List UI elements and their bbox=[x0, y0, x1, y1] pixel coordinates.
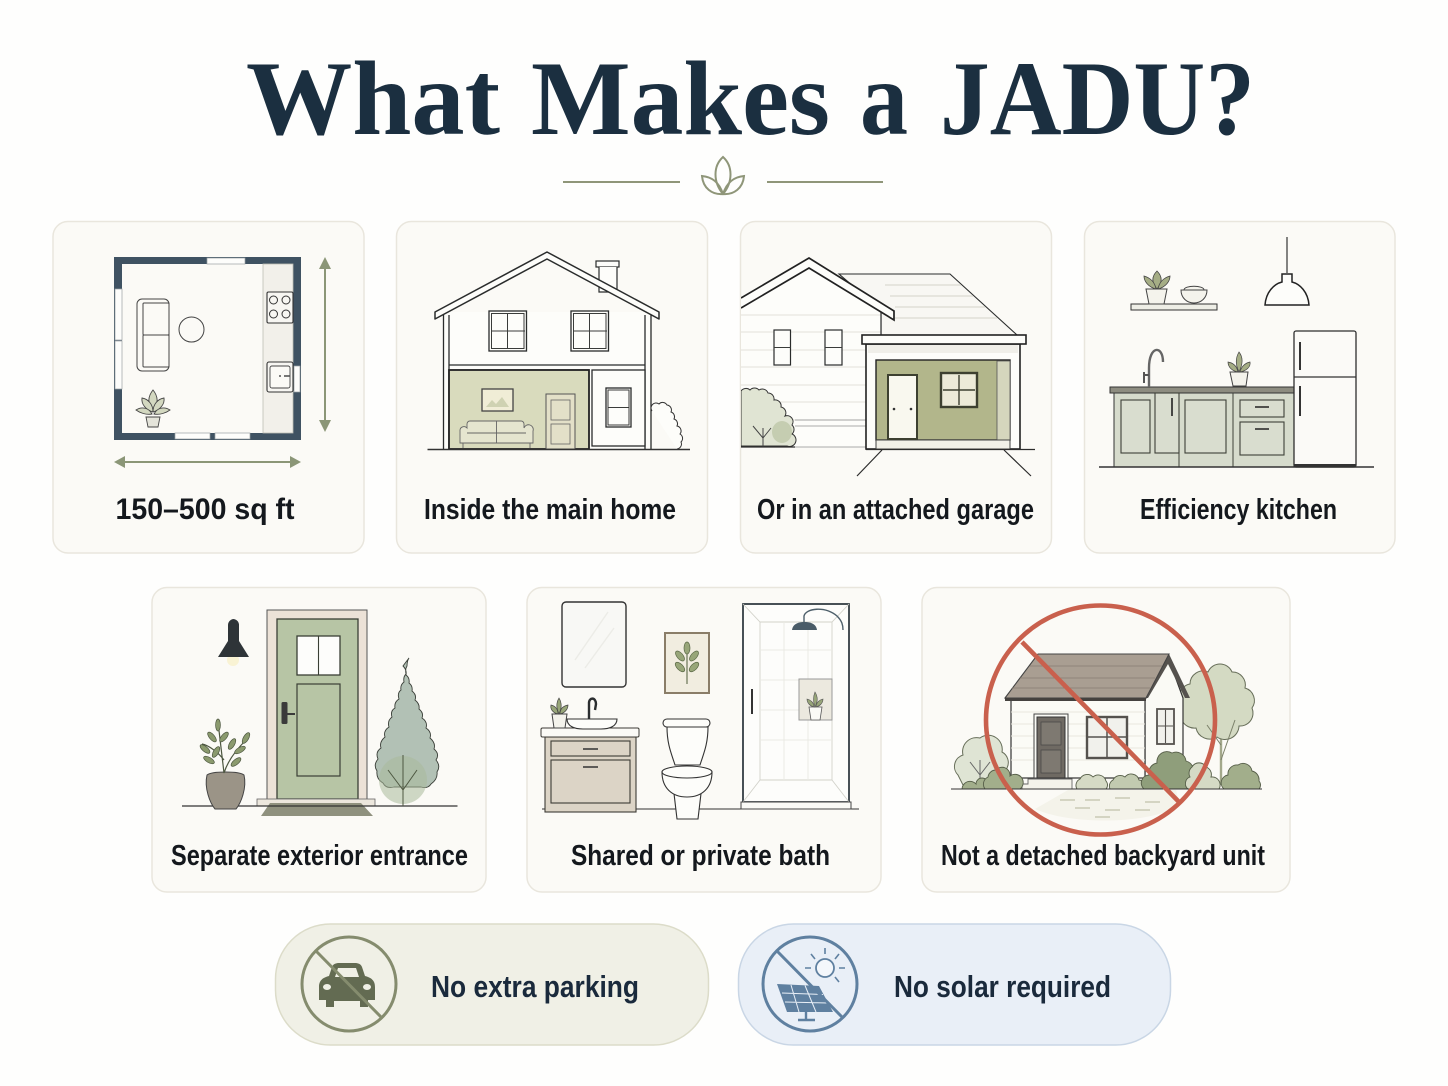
panel: attached garage bbox=[740, 222, 1052, 553]
title: What bbox=[246, 40, 500, 157]
title: Makes bbox=[531, 40, 830, 157]
panel: 150-500 sq ft bbox=[53, 222, 364, 553]
panel: efficiency kitchen bbox=[1084, 222, 1395, 553]
floor plan bbox=[114, 257, 301, 440]
label: Or in an attached garage bbox=[757, 494, 1034, 526]
bathroom illustration bbox=[541, 602, 859, 819]
title: a bbox=[860, 40, 908, 157]
entrance illustration bbox=[182, 610, 458, 816]
title: JADU? bbox=[940, 40, 1255, 157]
prohibition sign bbox=[986, 606, 1215, 834]
pill: no solar required bbox=[738, 924, 1170, 1045]
house illustration bbox=[428, 252, 690, 450]
pill: no extra parking bbox=[276, 924, 708, 1045]
label: No solar required bbox=[894, 969, 1111, 1004]
icon: no solar bbox=[763, 937, 857, 1031]
dimension arrows bbox=[114, 257, 331, 468]
backyard cottage illustration bbox=[951, 654, 1262, 821]
panel: not a detached backyard unit bbox=[922, 588, 1290, 892]
label: Not a detached backyard unit bbox=[941, 840, 1265, 872]
garage house illustration bbox=[741, 258, 1035, 476]
title divider with leaf icon bbox=[563, 157, 883, 194]
panel: separate exterior entrance bbox=[152, 588, 486, 892]
label: No extra parking bbox=[431, 969, 639, 1004]
label: 150–500 sq ft bbox=[116, 493, 295, 526]
label: Shared or private bath bbox=[571, 840, 830, 872]
label: Efficiency kitchen bbox=[1140, 494, 1337, 526]
title bbox=[246, 40, 1255, 157]
label: Inside the main home bbox=[424, 494, 676, 526]
label: Separate exterior entrance bbox=[171, 840, 468, 872]
panel: inside the main home bbox=[396, 222, 708, 553]
panel: shared or private bath bbox=[527, 588, 881, 892]
kitchen illustration bbox=[1099, 237, 1374, 467]
icon: no car bbox=[302, 937, 396, 1031]
